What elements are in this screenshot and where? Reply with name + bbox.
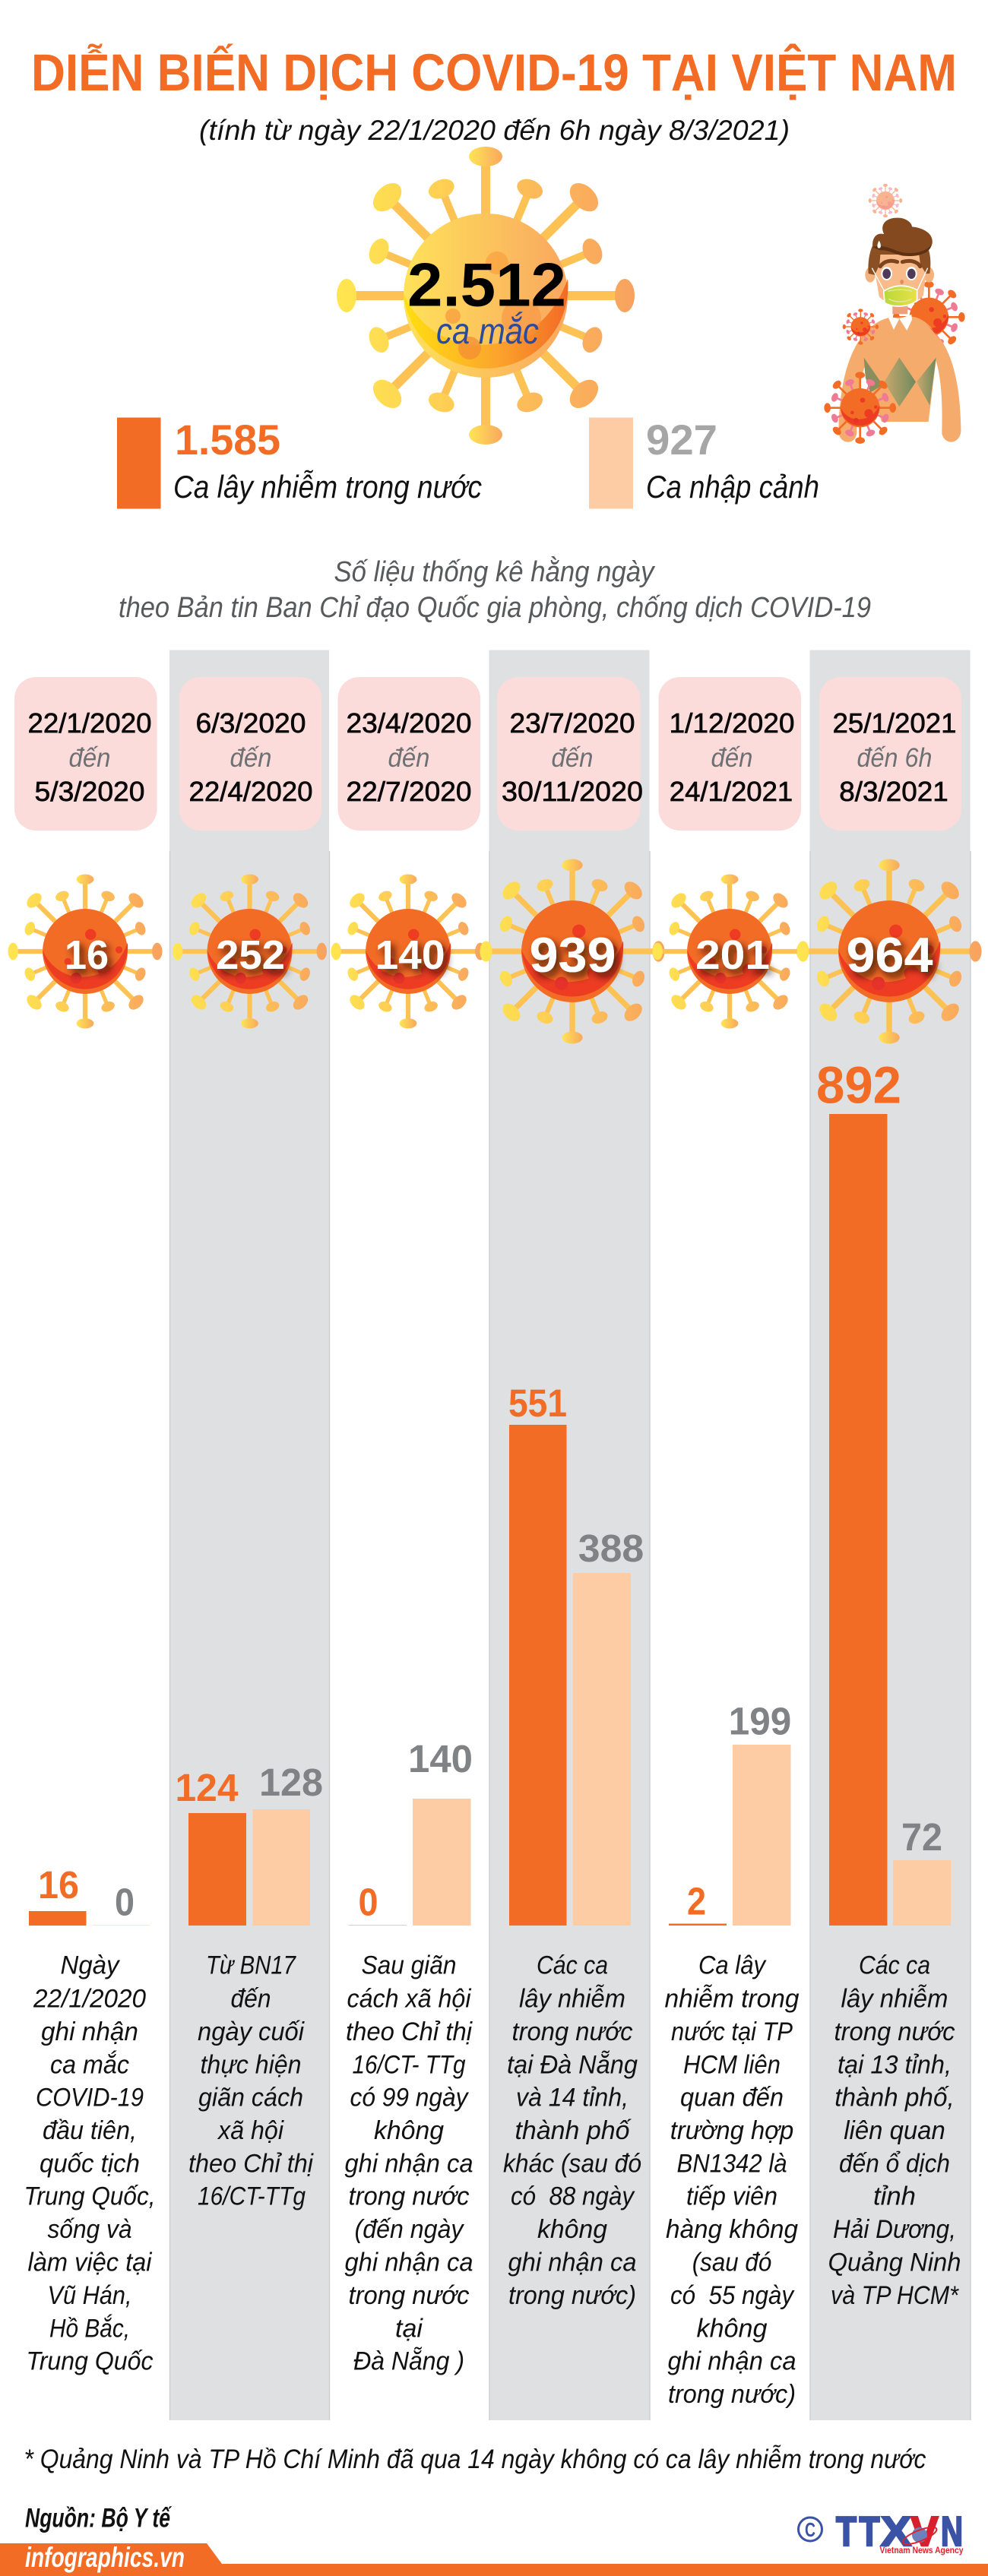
legend: imported cases — [589, 416, 819, 509]
date card — [819, 677, 961, 831]
date card: 23/7/2020 — [509, 707, 635, 739]
description: ghi nhận ca — [667, 2347, 796, 2375]
description — [24, 1951, 155, 2375]
description: thành phố, — [834, 2084, 955, 2112]
date card — [14, 677, 157, 831]
description: ghi nhận ca — [508, 2248, 637, 2277]
footnote: * Quảng Ninh và TP Hồ Chí Minh đã qua 14 ngày không có ca lây nhiễm trong nước — [24, 2445, 926, 2474]
description — [503, 1951, 641, 2310]
date card — [179, 677, 321, 831]
virus total 140 — [329, 872, 487, 1030]
description: Từ BN17 — [206, 1951, 296, 1980]
logo: TTXVN: V — [910, 2508, 939, 2555]
description: trong nước — [834, 2017, 955, 2046]
bars — [508, 1381, 644, 1926]
description: Các ca — [537, 1951, 608, 1980]
description — [828, 1951, 961, 2310]
date card: đến — [68, 743, 111, 773]
description: tại Đà Nẵng — [507, 2050, 638, 2079]
legend: domestic cases: 1.585 — [175, 416, 280, 464]
legend: imported cases: Ca nhập cảnh — [646, 469, 819, 505]
description: tỉnh — [873, 2182, 916, 2211]
virus total 16: 16 — [65, 932, 109, 978]
date card: 24/1/2021 — [670, 776, 793, 807]
description: (sau đó — [692, 2248, 771, 2277]
description: theo Chỉ thị — [188, 2149, 314, 2178]
date card: 22/4/2020 — [188, 776, 313, 807]
section heading: Số liệu thống kê hằng ngày — [334, 555, 655, 588]
bars — [348, 1737, 473, 1926]
bars: 388 — [578, 1527, 644, 1570]
description: tiếp viên — [686, 2182, 777, 2211]
logo: TTXVN: T — [836, 2508, 857, 2555]
description: Vũ Hán, — [47, 2281, 132, 2310]
description: theo Chỉ thị — [346, 2017, 473, 2046]
description: đến — [231, 1985, 271, 2014]
total cases caption: ca mắc — [436, 312, 539, 352]
date card: 8/3/2021 — [839, 776, 948, 807]
description: trong nước) — [668, 2380, 796, 2409]
legend: imported cases: 927 — [646, 416, 717, 464]
bars — [669, 1699, 791, 1926]
description: tại 13 tỉnh, — [838, 2050, 952, 2079]
date card: 1/12/2020 — [669, 707, 795, 739]
date card: đến 6h — [857, 743, 932, 773]
description: không — [696, 2315, 768, 2343]
description: Trung Quốc, — [24, 2182, 155, 2211]
description: không — [537, 2215, 607, 2244]
section heading — [119, 555, 871, 624]
bars: 72 — [901, 1815, 942, 1859]
description: 16/CT-TTg — [198, 2182, 306, 2211]
description: đến ổ dịch — [839, 2149, 950, 2178]
description: Quảng Ninh — [828, 2248, 961, 2277]
bars: 140 — [408, 1737, 473, 1780]
description: ghi nhận ca — [345, 2248, 473, 2277]
description: làm việc tại — [27, 2248, 153, 2277]
description: hàng không — [666, 2215, 798, 2244]
description: quan đến — [680, 2084, 784, 2112]
logo: TTXVN: C — [805, 2518, 815, 2541]
description: Trung Quốc — [26, 2347, 154, 2375]
bars: 551 — [508, 1381, 567, 1425]
description: Sau giãn — [362, 1951, 456, 1980]
column 2: 6/3/2020 to 22/4/2020 — [171, 677, 328, 2211]
date card: đến — [711, 743, 752, 773]
description: thành phố — [515, 2116, 632, 2145]
bars — [175, 1761, 323, 1926]
virus total 252 — [171, 872, 328, 1030]
column 5: 1/12/2020 to 24/1/2021 — [651, 677, 809, 2409]
source: Nguồn: Bộ Y tế — [25, 2503, 173, 2533]
total cases virus — [334, 144, 638, 448]
legend: domestic cases: Ca lây nhiễm trong nước — [173, 469, 482, 505]
description — [664, 1951, 800, 2409]
description: sống và — [47, 2215, 132, 2244]
column background bands — [169, 650, 971, 2420]
description: 16/CT- TTg — [353, 2050, 466, 2079]
virus total 964 — [795, 857, 983, 1046]
virus total 939: 939 — [529, 927, 616, 983]
virus total 201: 201 — [695, 932, 770, 978]
description: ngày cuối — [198, 2017, 305, 2046]
description: Ngày — [61, 1951, 120, 1980]
description: nước tại TP — [671, 2017, 793, 2046]
subtitle: (tính từ ngày 22/1/2020 đến 6h ngày 8/3/2021) — [199, 115, 790, 146]
total cases number: 2.512 — [407, 251, 566, 319]
bars — [29, 1863, 150, 1926]
description: BN1342 là — [676, 2149, 787, 2178]
column 1: 22/1/2020 to 5/3/2020 — [6, 677, 164, 2375]
description: nhiễm trong — [664, 1985, 800, 2014]
column 3: 23/4/2020 to 22/7/2020 — [329, 677, 487, 2375]
description: Hồ Bắc, — [49, 2315, 130, 2343]
virus total 252: 252 — [216, 932, 285, 978]
footer banner — [0, 2542, 988, 2576]
description: COVID-19 — [36, 2084, 144, 2112]
description: Các ca — [859, 1951, 930, 1980]
description: không — [374, 2116, 444, 2145]
bars: 892 — [816, 1056, 901, 1114]
description: giãn cách — [198, 2084, 303, 2112]
description: trong nước) — [508, 2281, 636, 2310]
description: có 55 ngày — [670, 2281, 795, 2310]
description: ghi nhận — [41, 2017, 138, 2046]
description: tại — [395, 2315, 423, 2343]
description: xã hội — [217, 2116, 284, 2145]
legend: domestic cases — [117, 416, 482, 509]
illustration: person with mask — [825, 184, 964, 443]
description: Đà Nẵng ) — [353, 2347, 464, 2375]
description: lây nhiễm — [519, 1985, 625, 2014]
date card: 22/1/2020 — [27, 707, 151, 739]
virus total 939 — [478, 857, 667, 1046]
description: có 88 ngày — [511, 2182, 635, 2211]
date card: 30/11/2020 — [502, 776, 643, 807]
bars — [816, 1056, 951, 1926]
date card: 6/3/2020 — [196, 707, 306, 739]
bars: 128 — [259, 1761, 323, 1804]
footer banner: infographics.vn — [25, 2542, 185, 2573]
description: thực hiện — [201, 2050, 301, 2079]
bars: 199 — [729, 1699, 791, 1743]
description: HCM liên — [683, 2050, 781, 2079]
description: ca mắc — [50, 2050, 129, 2079]
description: Hải Dương, — [833, 2215, 956, 2244]
description — [188, 1951, 314, 2211]
description: cách xã hội — [347, 1985, 472, 2014]
description: và 14 tỉnh, — [516, 2084, 629, 2112]
description: liên quan — [844, 2116, 945, 2145]
virus total 16 — [6, 872, 164, 1030]
bars: 124 — [175, 1766, 239, 1809]
virus total 201 — [651, 872, 809, 1030]
date card: 23/4/2020 — [347, 707, 471, 739]
logo: TTXVN: N — [941, 2508, 963, 2555]
date card — [658, 677, 801, 831]
date card: 25/1/2021 — [833, 707, 956, 739]
description: trong nước — [512, 2017, 632, 2046]
description: có 99 ngày — [350, 2084, 469, 2112]
virus total 964: 964 — [847, 927, 933, 983]
description: 22/1/2020 — [33, 1985, 146, 2014]
date card: đến — [230, 743, 272, 773]
description: Ca lây — [698, 1951, 767, 1980]
date card: đến — [552, 743, 593, 773]
logo: TTXVN: Vietnam News Agency — [880, 2546, 964, 2555]
section heading: theo Bản tin Ban Chỉ đạo Quốc gia phòng, chống dịch COVID-19 — [119, 592, 871, 624]
logo: TTXVN: X — [881, 2508, 911, 2555]
logo: TTXVN: T — [859, 2508, 880, 2555]
description: quốc tịch — [40, 2149, 140, 2178]
description — [345, 1951, 473, 2375]
bars: 16 — [38, 1863, 79, 1907]
description: lây nhiễm — [841, 1985, 948, 2014]
virus total 140: 140 — [375, 932, 445, 978]
description: trường hợp — [670, 2116, 793, 2145]
column 6: 25/1/2021 to 6h 8/3/2021 — [795, 677, 983, 2310]
date card: đến — [388, 743, 430, 773]
description: khác (sau đó — [503, 2149, 641, 2178]
description: đầu tiên, — [43, 2116, 137, 2145]
description: (đến ngày — [354, 2215, 464, 2244]
date card: 22/7/2020 — [347, 776, 471, 807]
bars: 2 — [687, 1880, 706, 1923]
description: và TP HCM* — [831, 2281, 960, 2310]
description: trong nước — [348, 2182, 470, 2211]
logo: TTXVN — [798, 2508, 964, 2555]
date card — [497, 677, 643, 831]
bars: 0 — [359, 1880, 378, 1924]
bars: 0 — [115, 1880, 135, 1924]
description: trong nước — [348, 2281, 470, 2310]
description: ghi nhận ca — [345, 2149, 473, 2178]
column 4: 23/7/2020 to 30/11/2020 — [478, 677, 667, 2310]
date card: 5/3/2020 — [35, 776, 144, 807]
date card — [337, 677, 480, 831]
